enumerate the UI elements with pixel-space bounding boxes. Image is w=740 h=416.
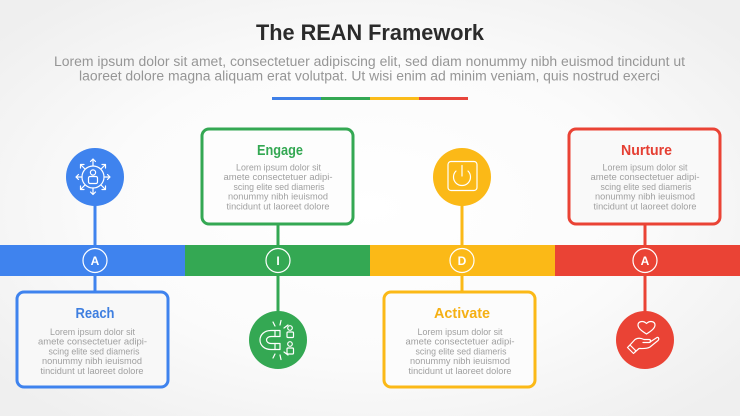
body text: Activate: [406, 327, 514, 377]
body text: Reach: [38, 327, 147, 377]
subtitle text: Lorem ipsum dolor sit amet, consectetuer adipiscing elit, sed diam nonummy nibh euismod tincidunt ut: [54, 54, 685, 69]
body text: Nurture: amete consectetuer adipi-: [590, 172, 700, 183]
body text: Reach: amete consectetuer adipi-: [38, 336, 147, 348]
marker: D (Activate): D: [458, 254, 467, 268]
icon: power button: [433, 148, 491, 206]
body text: Nurture: scing elite sed diameris: [600, 182, 692, 193]
title: The REAN Framework: [256, 20, 484, 45]
body text: Engage: tincidunt ut laoreet dolore: [226, 202, 330, 212]
body text: Engage: Lorem ipsum dolor sit: [236, 162, 321, 174]
body text: Activate: amete consectetuer adipi-: [406, 336, 514, 348]
body text: Nurture: [590, 162, 700, 212]
body text: Nurture: Lorem ipsum dolor sit: [602, 162, 688, 174]
body text: Activate: Lorem ipsum dolor sit: [418, 327, 503, 338]
panel: Reach: [17, 292, 168, 387]
title divider: [272, 97, 468, 100]
body text: Engage: [224, 162, 332, 212]
body text: Engage: nonummy nibh ieuismod: [228, 192, 328, 202]
timeline bar: [0, 245, 740, 276]
marker: I (Engage): I: [276, 254, 280, 268]
body text: Activate: tincidunt ut laoreet dolore: [408, 366, 512, 377]
panel: Nurture: [569, 129, 720, 224]
body text: Reach: tincidunt ut laoreet dolore: [40, 366, 144, 377]
marker: A (Nurture): A: [641, 254, 650, 268]
marker: A (Nurture): [633, 248, 657, 272]
marker: D (Activate): [450, 248, 474, 272]
body text: Activate: nonummy nibh ieuismod: [410, 356, 510, 367]
connector lines: [95, 177, 645, 340]
subtitle text: [54, 54, 685, 84]
heading: Reach: Reach: [76, 305, 114, 322]
body text: Engage: scing elite sed diameris: [234, 182, 325, 193]
icon: magnet attracting people: [249, 311, 307, 369]
subtitle text: laoreet dolore magna aliquam erat volutpat. Ut wisi enim ad minim veniam, quis nostrud exerci: [79, 68, 660, 84]
body text: Nurture: tincidunt ut laoreet dolore: [594, 202, 696, 212]
panel: Engage: [202, 129, 353, 224]
body text: Nurture: nonummy nibh ieuismod: [595, 192, 695, 202]
heading: Engage: Engage: [257, 142, 303, 159]
body text: Reach: scing elite sed diameris: [48, 346, 140, 358]
body text: Reach: Lorem ipsum dolor sit: [50, 327, 135, 338]
marker: A (Reach): A: [91, 254, 100, 268]
body text: Activate: scing elite sed diameris: [416, 346, 507, 358]
panel: Activate: [384, 292, 535, 387]
marker: A (Reach): [83, 248, 107, 272]
body text: Engage: amete consectetuer adipi-: [224, 172, 332, 183]
icon: reach person with outward arrows: [66, 148, 124, 206]
heading: Activate: Activate: [434, 305, 490, 322]
marker: I (Engage): [266, 248, 290, 272]
body text: Reach: nonummy nibh ieuismod: [42, 356, 142, 367]
heading: Nurture: Nurture: [621, 142, 672, 159]
icon: heart in hand: [616, 311, 674, 369]
